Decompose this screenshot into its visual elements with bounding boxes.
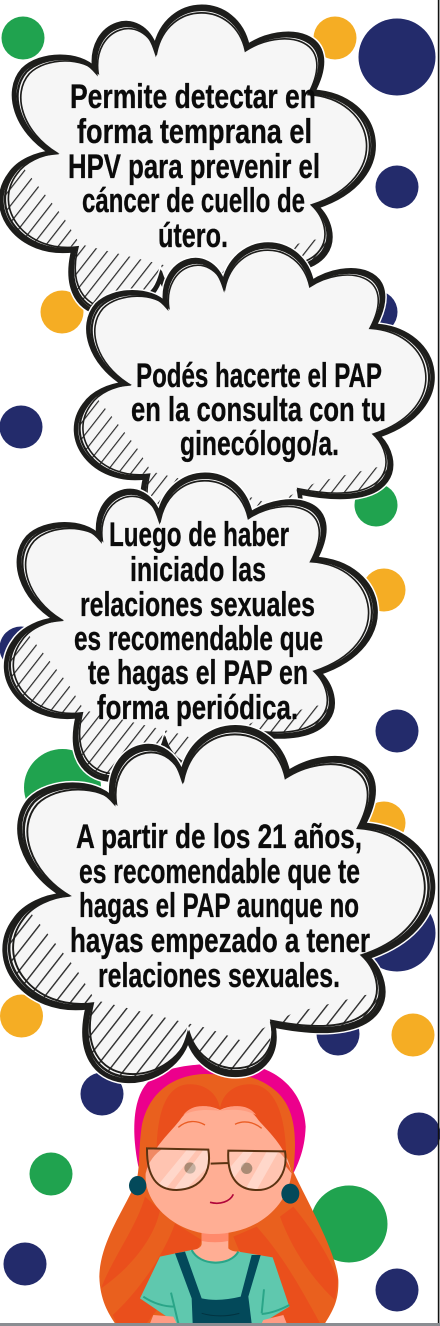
eyes bbox=[184, 1162, 252, 1174]
text: cloud 3: forma periódica. bbox=[97, 689, 298, 727]
earrings bbox=[129, 1176, 299, 1204]
text: cloud 1 bbox=[68, 78, 320, 255]
mouth bbox=[210, 1194, 233, 1203]
speech cloud 1 bbox=[0, 0, 406, 314]
right edge line bbox=[438, 0, 439, 1326]
text: cloud 2 bbox=[131, 357, 386, 463]
overalls and shirt bbox=[140, 1250, 289, 1323]
hair bbox=[99, 1074, 338, 1323]
text: cloud 3: iniciado las bbox=[130, 551, 266, 589]
speech cloud 4 bbox=[0, 700, 440, 1081]
text: cloud 4 bbox=[70, 818, 370, 995]
text: cloud 3: es recomendable que bbox=[74, 620, 323, 658]
speech cloud 3 bbox=[2, 471, 380, 782]
text: cloud 1: HPV para prevenir el bbox=[68, 148, 320, 186]
face bbox=[146, 1106, 292, 1263]
text: cloud 3 bbox=[74, 516, 323, 727]
glasses bbox=[147, 1148, 286, 1190]
text: cloud 1: Permite detectar en bbox=[70, 78, 316, 116]
pink headband bbox=[134, 1063, 306, 1173]
text: cloud 3: te hagas el PAP en bbox=[88, 654, 308, 692]
eyebrows bbox=[178, 1121, 262, 1128]
speech cloud 2 bbox=[74, 241, 435, 508]
text: cloud 4: relaciones sexuales. bbox=[98, 957, 340, 995]
text: cloud 1: cáncer de cuello de bbox=[82, 182, 305, 220]
text: cloud 1: forma temprana el bbox=[77, 113, 312, 151]
text: cloud 3: relaciones sexuales bbox=[80, 586, 315, 624]
character: red-haired girl with glasses bbox=[99, 1063, 338, 1323]
bottom edge band bbox=[0, 1323, 440, 1326]
text: cloud 2: ginecólogo/a. bbox=[180, 425, 339, 463]
text: cloud 1: útero. bbox=[158, 217, 228, 255]
text: cloud 4: A partir de los 21 años, bbox=[76, 818, 362, 856]
text: cloud 3: Luego de haber bbox=[109, 516, 289, 554]
